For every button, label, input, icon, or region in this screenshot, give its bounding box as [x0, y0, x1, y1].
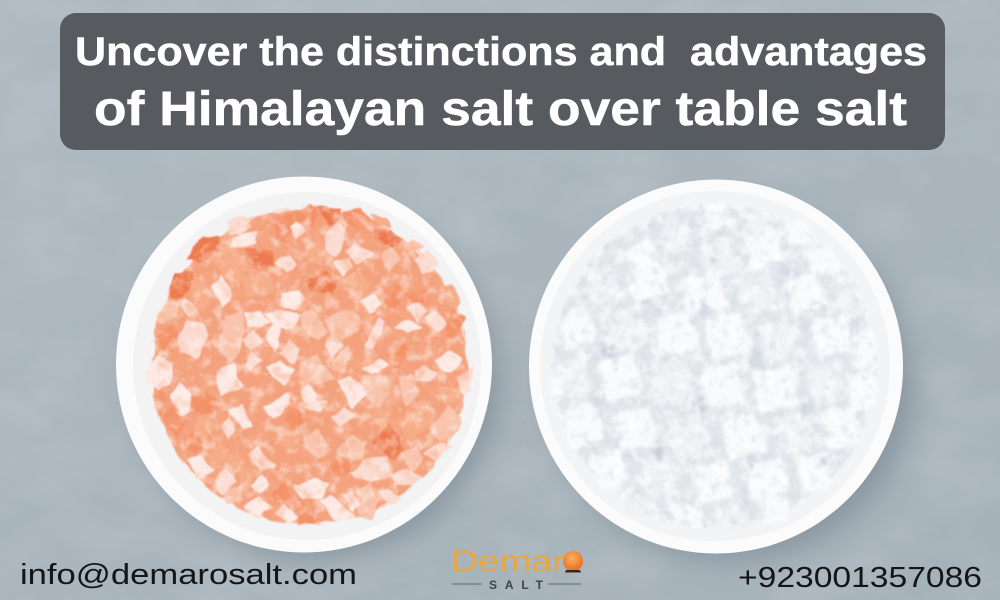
title banner — [60, 13, 945, 150]
bowl of white table salt — [529, 180, 912, 560]
bowl of pink Himalayan salt — [116, 176, 500, 558]
logo icon: salt lamp — [563, 551, 583, 572]
Demaro Salt logo: Demar — [451, 545, 565, 578]
title banner: of Himalayan salt over table salt — [94, 83, 907, 136]
email contact: info@demarosalt.com — [20, 559, 357, 591]
logo tagline: SALT: SALT — [489, 578, 544, 592]
title banner: Uncover the distinctions and advantages — [75, 30, 927, 74]
phone contact: +923001357086 — [738, 562, 982, 594]
Demaro Salt logo — [451, 545, 583, 592]
